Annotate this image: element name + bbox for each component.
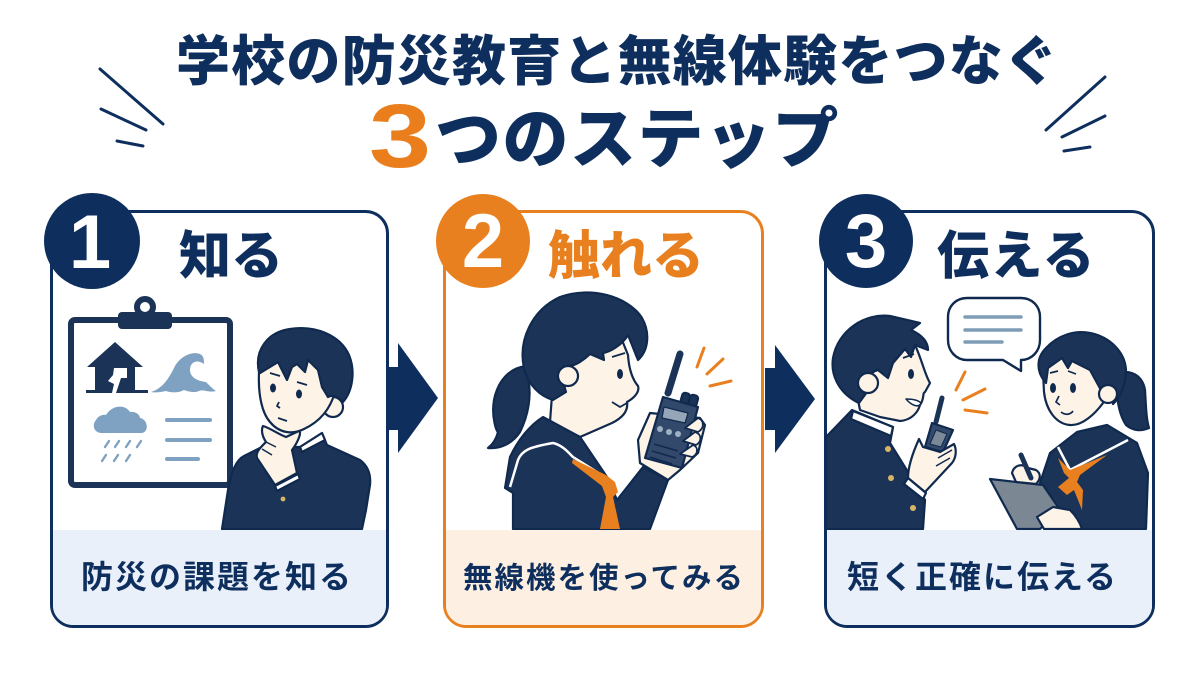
- step number 1: [44, 193, 140, 289]
- writing hand and pen: [1012, 465, 1040, 484]
- heading: 伝える: 伝える: [937, 228, 1096, 286]
- caption band 3: [827, 530, 1152, 625]
- decoration: left burst lines: [100, 69, 163, 146]
- signal lines: [956, 372, 987, 413]
- caption: 短く正確に伝える: 短く正確に伝える: [847, 559, 1118, 595]
- figure: girl taking notes: [990, 332, 1149, 529]
- step number 1: 1: [69, 200, 111, 285]
- title line 2: 3: [369, 86, 431, 187]
- hair: [523, 293, 647, 400]
- uniform: [505, 417, 668, 529]
- title line 2: つのステップ: [435, 102, 840, 176]
- heading: 触れる: 触れる: [548, 228, 704, 286]
- text lines: [167, 420, 210, 459]
- heading: 知る: 知る: [179, 228, 283, 286]
- radio: [645, 354, 699, 468]
- panel 1 frame: [52, 212, 388, 626]
- step number 2: [436, 194, 530, 288]
- figure: thinking boy: [222, 328, 370, 529]
- radio: [925, 398, 953, 452]
- ponytail: [488, 366, 530, 448]
- arrow 1: [389, 343, 438, 453]
- panel 2 frame: [444, 212, 762, 626]
- speech bubble: [948, 298, 1040, 371]
- icon: rain cloud: [94, 407, 147, 461]
- panel: step 2: [436, 194, 762, 626]
- caption band 1: [53, 530, 386, 625]
- fingers: [680, 418, 703, 457]
- panel: step 1: [44, 193, 388, 626]
- scarf: [572, 459, 620, 529]
- panel: step 3: [819, 194, 1154, 626]
- signal lines: [697, 348, 731, 386]
- figure: boy speaking into radio: [826, 316, 956, 529]
- step number 3: 3: [845, 199, 887, 284]
- figure: girl with radio: [488, 293, 705, 529]
- caption: 防災の課題を知る: 防災の課題を知る: [81, 559, 353, 595]
- decoration: right burst lines: [1046, 77, 1105, 151]
- step number 3: [819, 194, 913, 288]
- lower hand: [1037, 507, 1082, 529]
- title line 1: 学校の防災教育と無線体験をつなぐ: [176, 32, 1059, 92]
- step number 2: 2: [462, 199, 504, 284]
- title line 2: [369, 86, 840, 187]
- hand behind radio: [638, 413, 705, 480]
- icon: clipboard: [71, 299, 230, 485]
- icon: cracked house: [86, 342, 148, 393]
- caption band 2: [446, 530, 761, 625]
- arrow 2: [765, 345, 815, 453]
- icon: tsunami wave: [151, 353, 216, 392]
- panel 3 frame: [826, 212, 1154, 626]
- caption: 無線機を使ってみる: 無線機を使ってみる: [463, 562, 745, 595]
- clipboard: [990, 479, 1060, 529]
